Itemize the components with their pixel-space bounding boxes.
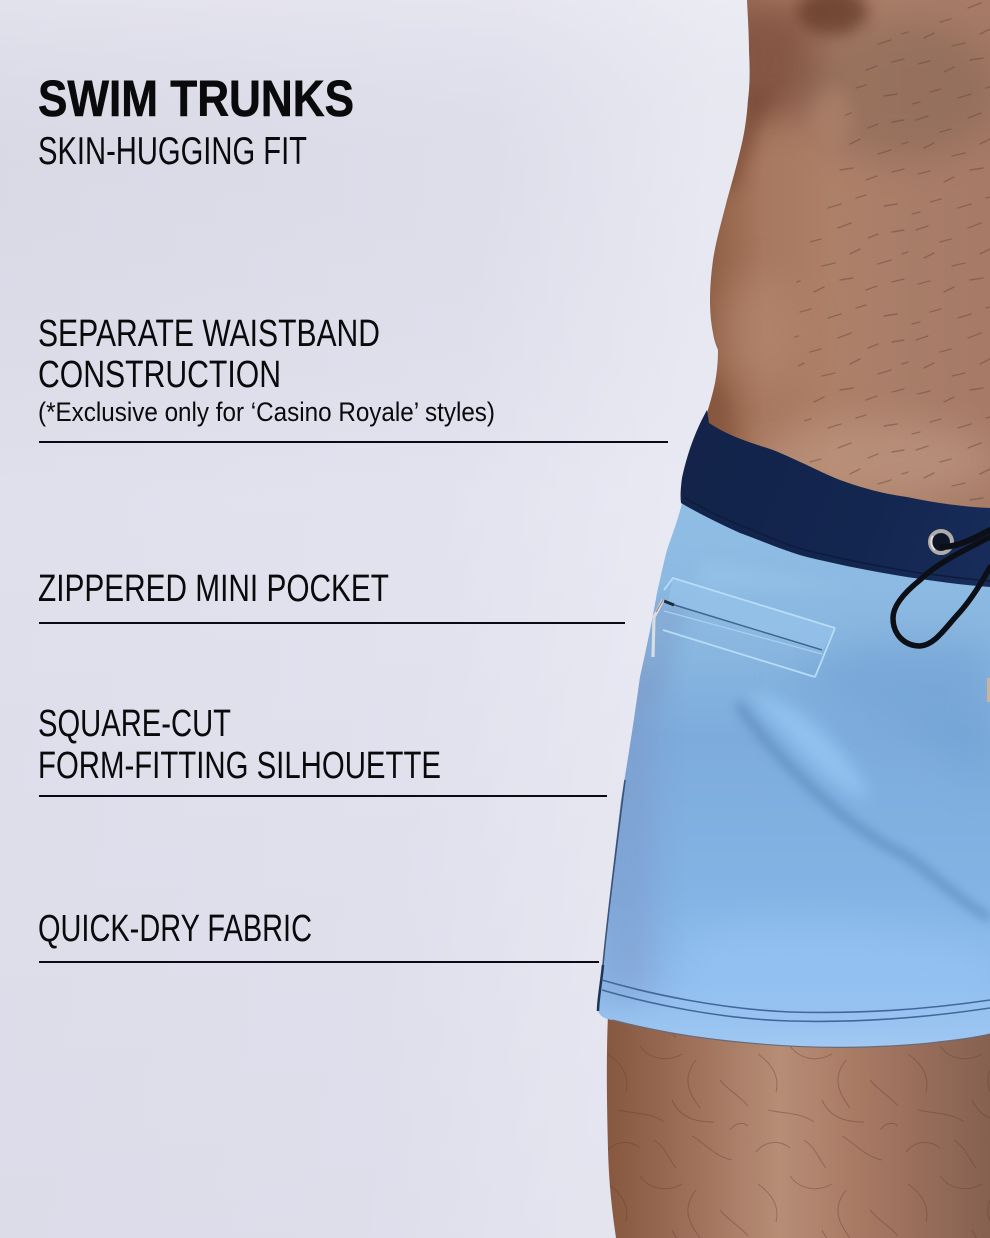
photo: navy waistband xyxy=(681,410,990,646)
callout: square-cut silhouette: FORM-FITTING SILHOUETTE xyxy=(38,745,441,787)
callout: separate waistband: (*Exclusive only for ‘Casino Royale’ styles) xyxy=(38,397,495,427)
black drawstring xyxy=(893,530,990,646)
subheading: skin-hugging fit: SKIN-HUGGING FIT xyxy=(38,130,307,173)
body hair xyxy=(790,0,990,510)
photo: light blue trunks xyxy=(590,500,990,1050)
callout: quick-dry fabric: QUICK-DRY FABRIC xyxy=(38,908,312,950)
fabric shading xyxy=(595,660,655,1000)
zippered mini pocket xyxy=(653,578,835,677)
waistband lower stitch xyxy=(684,497,990,581)
callout: zippered mini pocket: ZIPPERED MINI POCKET xyxy=(38,568,389,610)
photo: model torso xyxy=(707,0,990,508)
hem stitching xyxy=(602,980,990,1021)
skin glimpse at right edge xyxy=(987,678,990,702)
callout: separate waistband: SEPARATE WAISTBAND xyxy=(38,313,380,355)
heading: swim trunks: SWIM TRUNKS xyxy=(38,70,354,127)
callout: square-cut silhouette: SQUARE-CUT xyxy=(38,703,231,745)
photo: model thigh xyxy=(600,1010,990,1238)
leg hair xyxy=(600,1010,990,1238)
icon: metal eyelet xyxy=(930,531,952,553)
callout: separate waistband xyxy=(38,313,668,443)
callout: square-cut silhouette xyxy=(38,703,607,797)
callout: separate waistband: CONSTRUCTION xyxy=(38,354,281,396)
zipper pull xyxy=(653,600,663,657)
torso shading xyxy=(796,0,868,36)
side seam xyxy=(603,780,625,965)
